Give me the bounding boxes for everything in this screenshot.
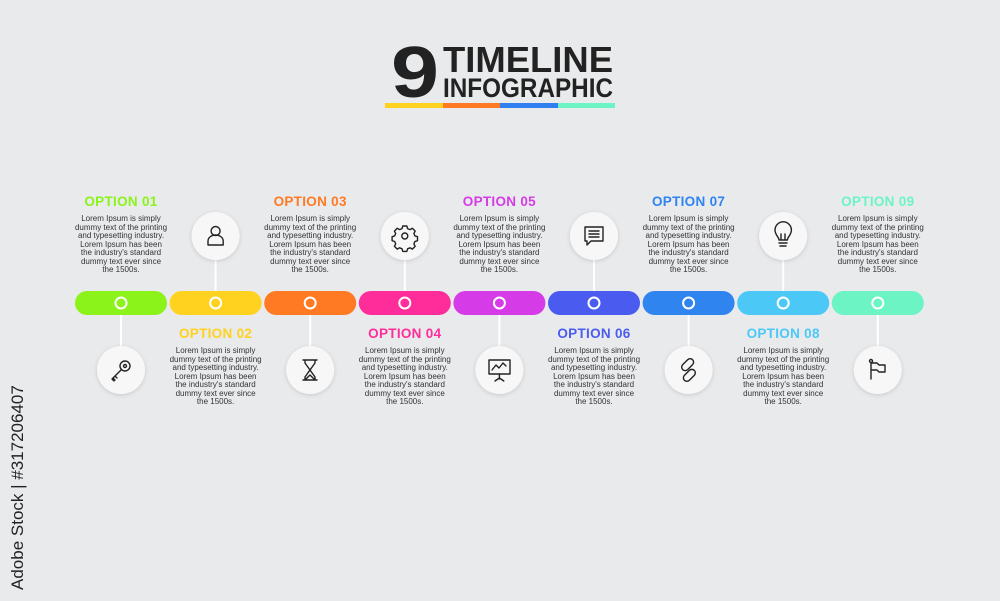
icon circles [97,212,902,394]
option 02: Lorem Ipsum is simply [176,346,255,355]
option 05: Lorem Ipsum is simply [460,214,539,223]
option 06: dummy text ever since [554,388,634,398]
option 09: Lorem Ipsum has been [837,240,919,248]
option 05: and typesetting industry. [456,231,542,240]
title [385,36,615,112]
option 05: the industry's standard [459,248,540,257]
option 08: dummy text ever since [743,388,823,398]
option 01: Lorem Ipsum has been [80,240,162,248]
option 01: the 1500s. [102,265,140,274]
option 08: OPTION 08 [747,326,820,341]
option 03: and typesetting industry. [267,231,353,240]
option 08: and typesetting industry. [740,363,826,372]
option 05 [453,194,545,274]
option 08 [737,326,829,406]
option 01: Lorem Ipsum is simply [81,214,161,223]
option 01: the industry's standard [81,248,161,257]
option 04 [359,326,451,406]
option 07: Lorem Ipsum has been [648,240,730,248]
option 06: and typesetting industry. [551,363,637,372]
option 07: OPTION 07 [652,194,725,209]
option 04: and typesetting industry. [362,363,448,372]
option 09: the 1500s. [859,265,896,274]
watermark side text: Adobe Stock | #317206407 [8,385,27,590]
option 07: the industry's standard [648,248,729,257]
option 03: OPTION 03 [274,194,347,209]
ring markers [116,298,883,308]
option 06: the industry's standard [554,380,634,389]
option 06: Lorem Ipsum is simply [554,346,634,355]
option 05: Lorem Ipsum has been [458,240,540,248]
timeline segments [75,291,924,315]
option 06: the 1500s. [575,397,613,406]
icon: link [680,357,697,383]
option 04: dummy text of the printing [359,354,451,364]
option 07: the 1500s. [670,265,707,274]
option 06: OPTION 06 [557,326,631,341]
option 05: the 1500s. [481,265,518,274]
option 04: Lorem Ipsum has been [364,372,446,380]
option 01: dummy text ever since [81,256,161,266]
option 09 [832,194,924,274]
option 02: dummy text ever since [176,388,256,398]
option 03: the 1500s. [292,265,329,274]
option 08: the industry's standard [743,380,823,389]
option 05: OPTION 05 [463,194,536,209]
option 01: dummy text of the printing [75,222,167,232]
option 01: OPTION 01 [84,194,158,209]
icon: bulb [775,222,791,246]
option 08: the 1500s. [764,397,802,406]
option 02: the industry's standard [175,380,256,389]
option 08: dummy text of the printing [737,354,829,364]
option 03: Lorem Ipsum is simply [270,214,350,223]
option 04: dummy text ever since [365,388,445,398]
option 08: Lorem Ipsum is simply [743,346,823,355]
option 02: OPTION 02 [179,326,252,341]
title color bar [385,103,615,108]
option 03: Lorem Ipsum has been [269,240,351,248]
title words: TIMELINE [443,39,613,80]
option 09: dummy text of the printing [832,222,924,232]
option 09: Lorem Ipsum is simply [838,214,918,223]
option 07: Lorem Ipsum is simply [649,214,728,223]
option 03: dummy text of the printing [264,222,356,232]
option 03: the industry's standard [270,248,350,257]
option 07: and typesetting industry. [646,231,732,240]
option 06 [548,326,640,406]
option 02: Lorem Ipsum has been [175,372,256,380]
icon: presentation chart [489,360,510,381]
option 01 [75,194,167,274]
option 02: dummy text of the printing [170,354,262,364]
option 04: Lorem Ipsum is simply [365,346,445,355]
option 04: the industry's standard [365,380,445,389]
icon: flag [870,360,885,379]
option 07: dummy text of the printing [643,222,735,232]
option 05: dummy text ever since [459,256,539,266]
option 07: dummy text ever since [649,256,729,266]
title words [443,39,613,103]
option 04: the 1500s. [386,397,423,406]
icon: person [208,226,223,245]
option 06: dummy text of the printing [548,354,640,364]
option 02: and typesetting industry. [173,363,259,372]
icon: key [112,361,130,381]
icon: hourglass [303,360,317,380]
option 07 [642,194,735,274]
icon: gear [392,226,417,251]
option 04: OPTION 04 [368,326,441,341]
option 03: dummy text ever since [270,256,350,266]
option 09: the industry's standard [838,248,918,257]
option 09: OPTION 09 [841,194,914,209]
option 06: Lorem Ipsum has been [553,372,635,380]
option 09: dummy text ever since [838,256,918,266]
option 03 [264,194,356,274]
option 02: the 1500s. [197,397,234,406]
option 08: Lorem Ipsum has been [742,372,824,380]
option 05: dummy text of the printing [453,222,545,232]
option 01: and typesetting industry. [78,231,164,240]
option 02 [170,326,262,406]
icon: chat [585,227,603,245]
option 09: and typesetting industry. [835,231,921,240]
